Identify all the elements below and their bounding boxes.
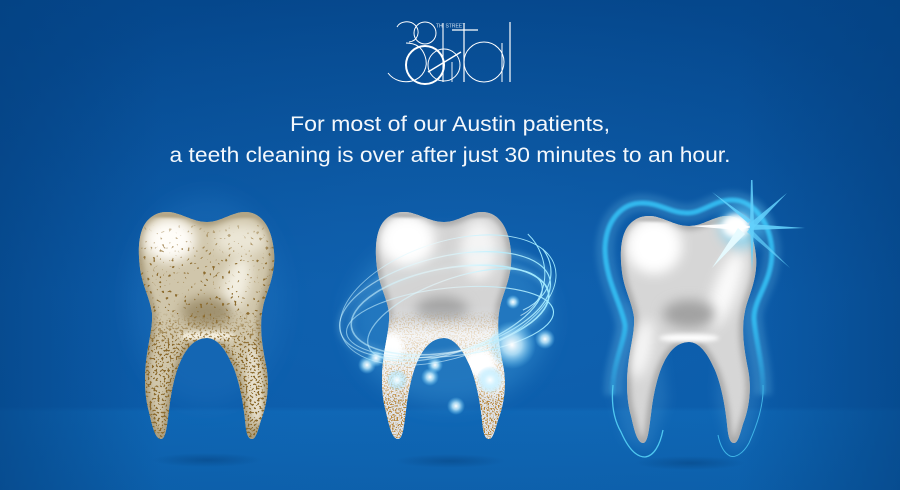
logo: 38th Street Dental [388,22,510,84]
sparkle glow dots [358,295,555,415]
heading text: For most of our Austin patients, [290,112,610,136]
plaque specks [135,225,280,445]
residual plaque on roots [382,312,505,439]
heading text: a teeth cleaning is over after just 30 minutes to an hour. [170,143,730,167]
floor shadows [152,453,745,470]
sparkling cleaning rings [324,208,572,390]
tooth: being cleaned [336,212,556,439]
protective halo [605,200,772,457]
heading text [170,112,730,167]
sparkle star [690,180,805,272]
tooth: stained with plaque [138,210,274,439]
logo small text: TH STREET [436,24,465,30]
tooth: clean and shining [605,180,805,457]
